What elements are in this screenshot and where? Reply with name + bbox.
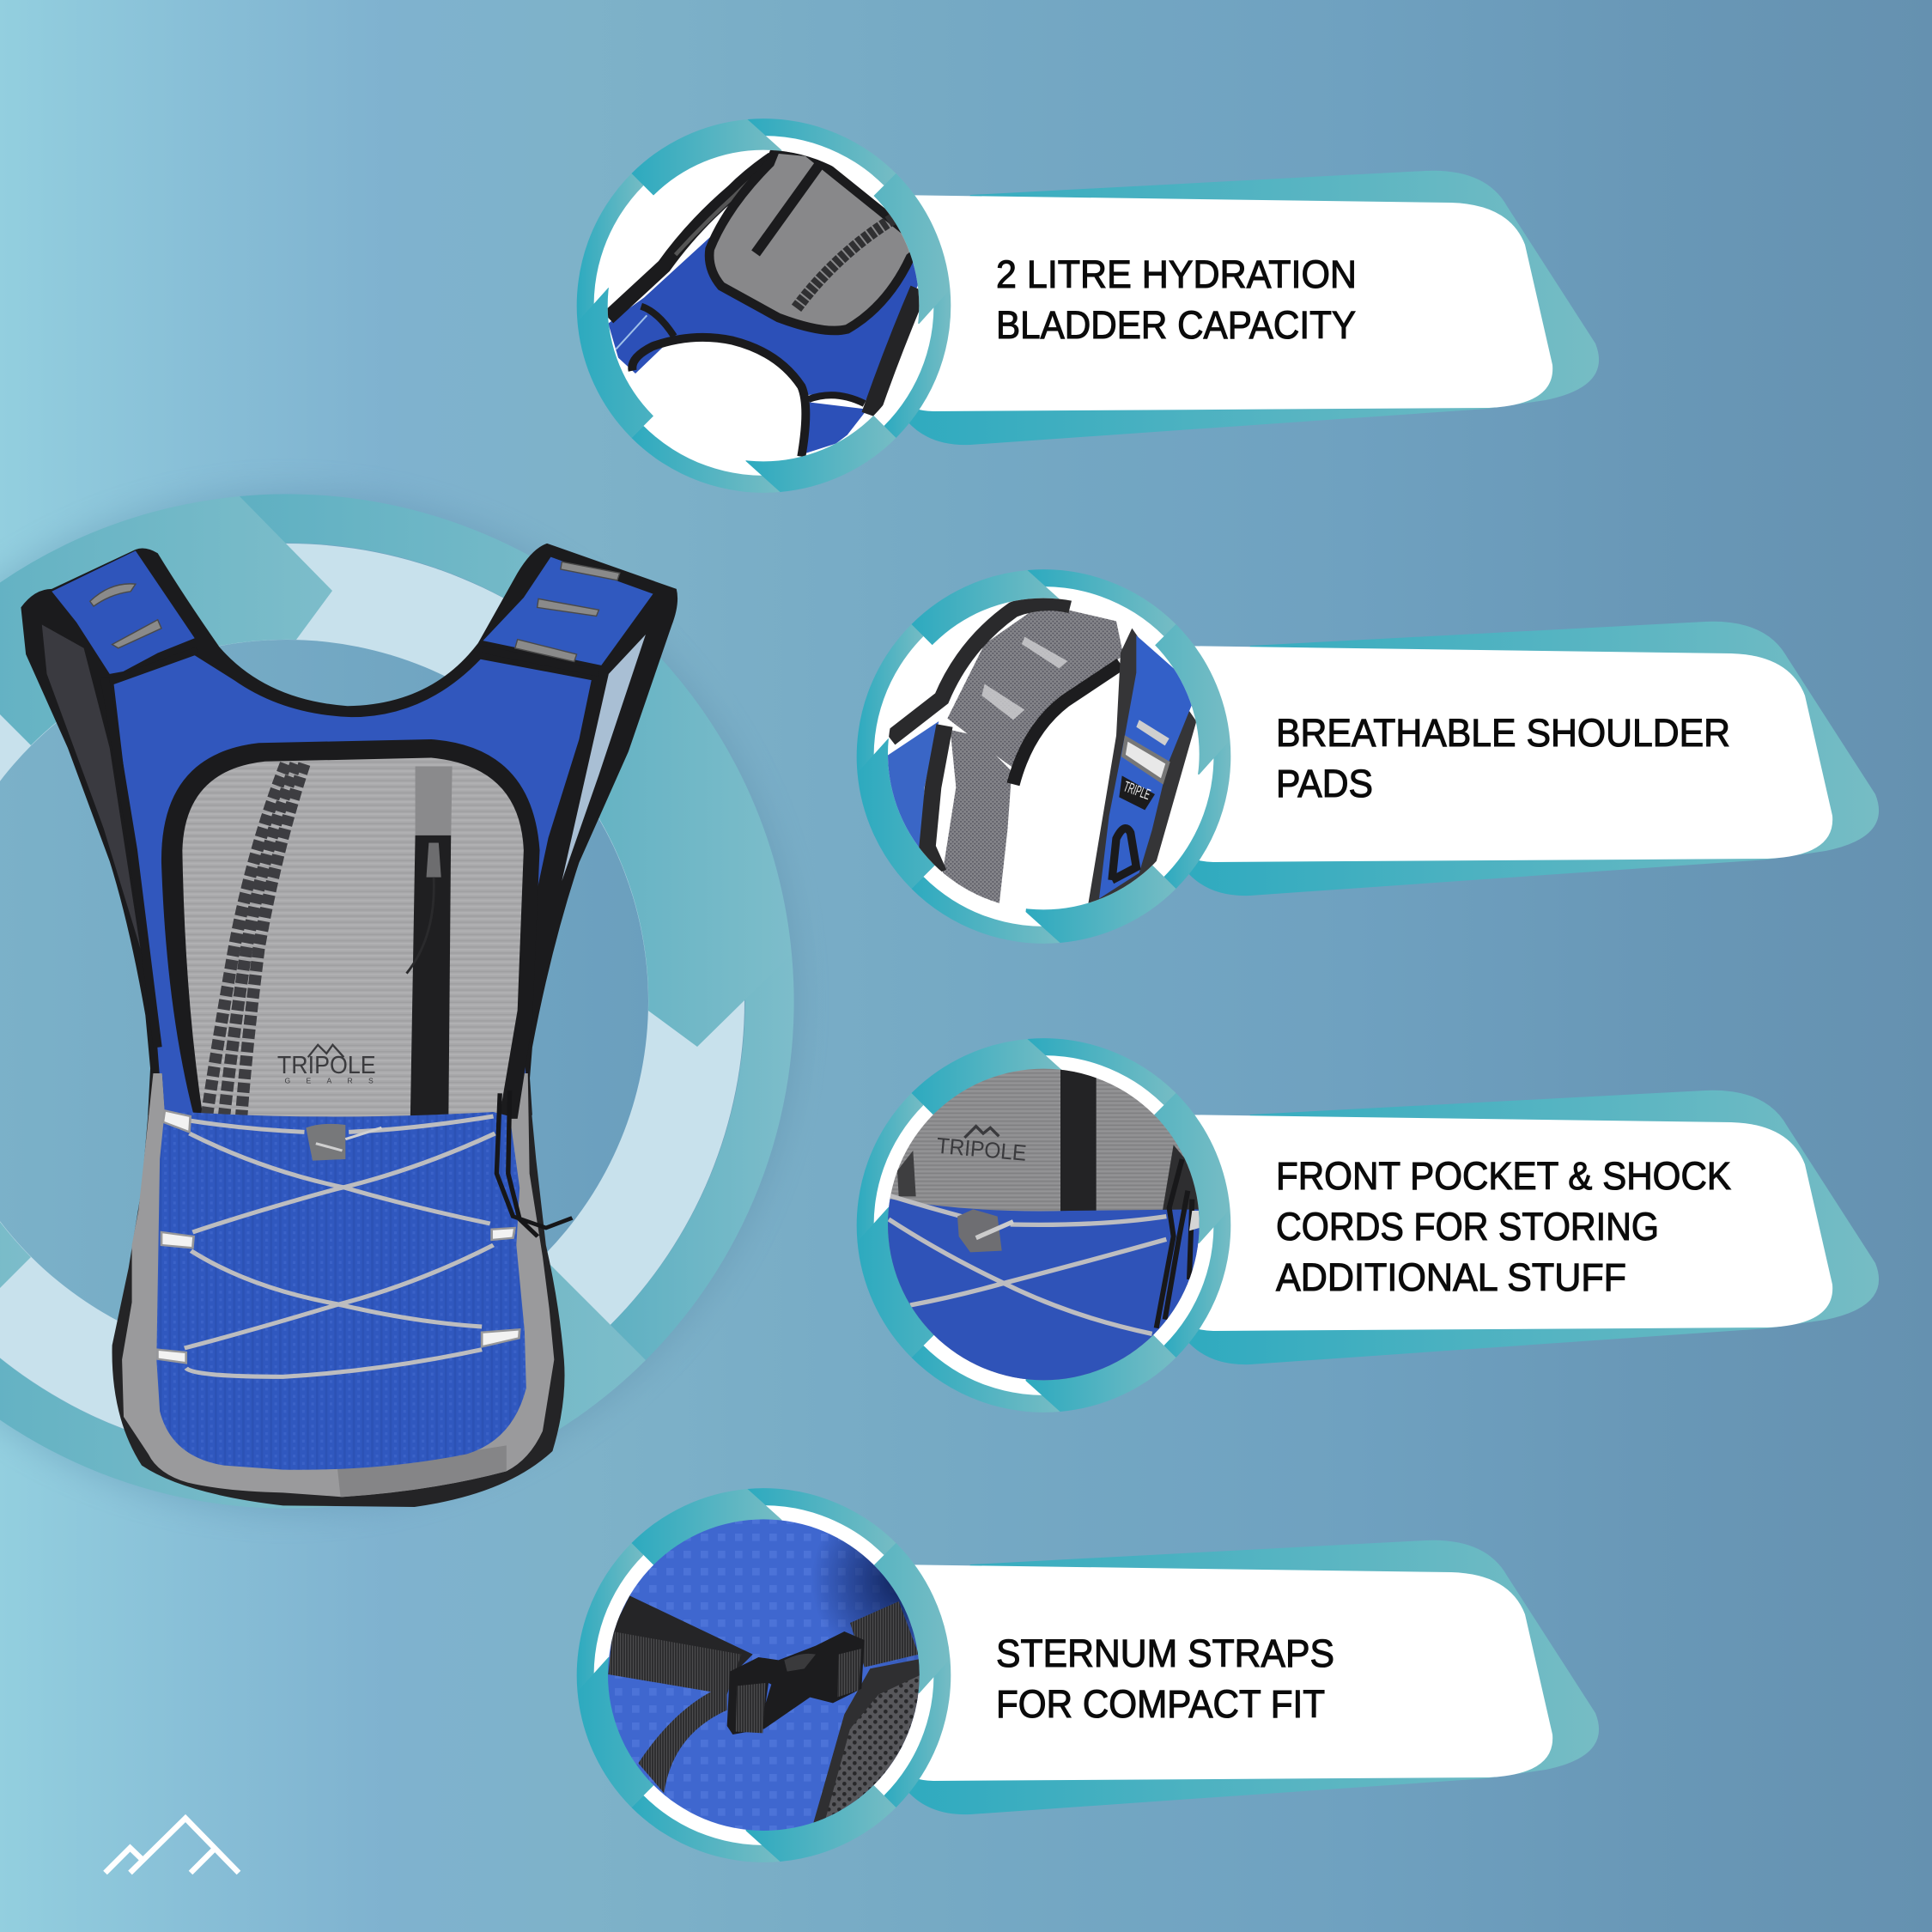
- upper body and straps: [21, 544, 677, 1115]
- label panel: [884, 171, 1599, 445]
- label text: 2 LITRE HYDRATION: [996, 252, 1357, 296]
- label text: PADS: [1276, 762, 1373, 805]
- label text: STERNUM STRAPS: [996, 1631, 1334, 1675]
- decorative circular arrows behind the backpack: [0, 489, 799, 1513]
- photo: shoulder pad: [884, 595, 1205, 916]
- callout: breathable shoulder pads: [857, 569, 1879, 944]
- cord lock: [306, 1124, 345, 1161]
- photo: shoulder pad: TRIPLE: [1121, 778, 1153, 803]
- label text: CORDS FOR STORING: [1276, 1205, 1659, 1249]
- tyre tread print: [207, 764, 304, 1115]
- label text: BREATHABLE SHOULDER: [1276, 711, 1730, 755]
- ring: [577, 118, 951, 493]
- logo on pocket: [938, 1124, 1025, 1161]
- ring: [577, 1488, 951, 1862]
- logo on pocket: GEARS: [284, 1076, 374, 1084]
- photo: bladder compartment: [607, 149, 925, 464]
- label panel: [884, 1540, 1599, 1814]
- photo: front pocket: [884, 1065, 1205, 1385]
- reflective cord tabs: [157, 1110, 519, 1363]
- logo on pocket: TRIPOLE: [277, 1052, 376, 1079]
- logo: mountain mark: [105, 1819, 239, 1873]
- ring: [857, 1038, 1230, 1413]
- front pocket with shock cords: [156, 1091, 572, 1470]
- label text: [1276, 1154, 1731, 1299]
- label text: FOR COMPACT FIT: [996, 1682, 1325, 1726]
- label text: BLADDER CAPACITY: [996, 303, 1356, 347]
- backpack product photo: [21, 544, 677, 1507]
- label text: [996, 252, 1357, 347]
- grey top pocket: [161, 739, 540, 1119]
- lower body, black edging and grey panels: [112, 1073, 565, 1507]
- callout: sternum straps: [577, 1488, 1599, 1862]
- logo on pocket: TRIPOLE: [935, 1133, 1028, 1166]
- label text: ADDITIONAL STUFF: [1276, 1255, 1626, 1299]
- label text: FRONT POCKET & SHOCK: [1276, 1154, 1731, 1198]
- photo: sternum strap buckle: [607, 1517, 921, 1832]
- zip strip: [416, 767, 453, 841]
- label panel: [1164, 1091, 1879, 1364]
- label text: [1276, 711, 1730, 805]
- label panel: [1164, 622, 1879, 896]
- callout: front pocket and shock cords: [857, 1038, 1879, 1413]
- zip pulls with cord: [496, 1091, 572, 1236]
- label text: [996, 1631, 1334, 1726]
- ring: [857, 569, 1230, 944]
- logo on pocket: [277, 1045, 376, 1084]
- callout: 2 litre hydration bladder capacity: [577, 118, 1599, 493]
